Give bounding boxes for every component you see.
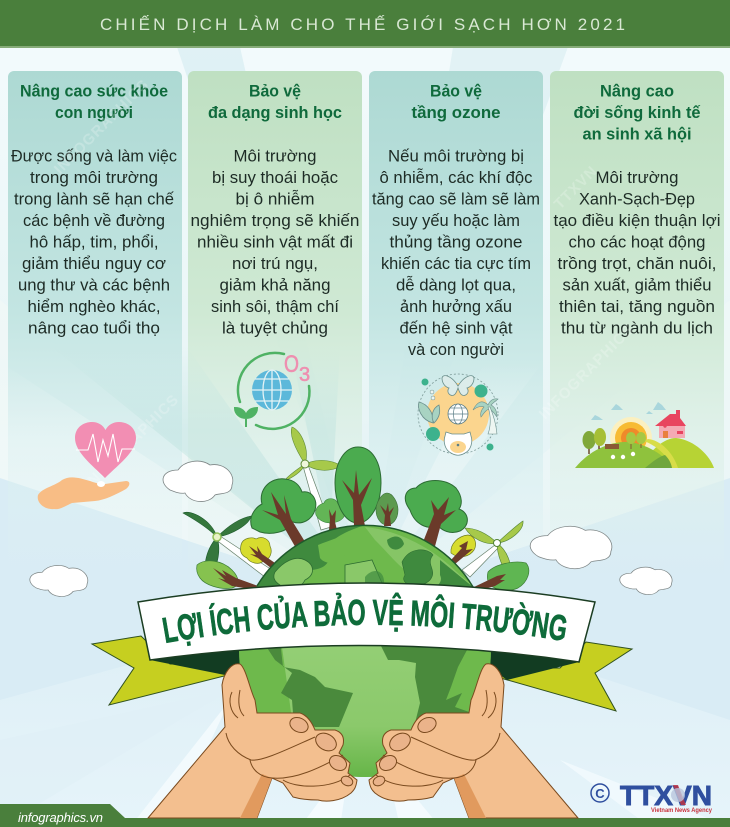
heading: ozone layer xyxy=(412,82,500,122)
text: ozone layer: đến hệ sinh vật xyxy=(400,318,513,338)
wind turbines xyxy=(183,427,523,582)
tree: large right xyxy=(405,480,467,550)
text: ozone layer: ô nhiễm, các khí độc xyxy=(380,168,533,187)
heading: biodiversity xyxy=(208,82,342,122)
watermarks: INFOGRAPHICS xyxy=(51,76,153,178)
icon: ozone globe: O xyxy=(284,351,299,378)
text: human health: các bệnh về đường xyxy=(23,211,165,230)
text: biodiversity: bị suy thoái hoặc xyxy=(212,168,338,187)
tree: small middle xyxy=(316,499,345,530)
text: ozone layer: Nếu môi trường bị xyxy=(388,146,524,166)
text: ozone layer: tăng cao sẽ làm sẽ làm xyxy=(372,190,540,208)
text: economy and welfare: thu từ ngành du lịch xyxy=(561,318,713,338)
panel: human health xyxy=(8,71,182,616)
watermarks: TTXVN xyxy=(551,163,601,213)
text: biodiversity: giảm khả năng xyxy=(220,276,330,294)
watermarks: INFOGRAPHICS xyxy=(81,391,183,493)
heading: ozone layer: tầng ozone xyxy=(412,104,500,122)
icon: biodiversity circle xyxy=(418,374,498,455)
ribbon tail left xyxy=(92,636,245,705)
text: economy and welfare: thiên tai, tăng nguồn xyxy=(559,297,715,316)
text: human health: hiểm nghèo khác, xyxy=(28,297,160,316)
text: economy and welfare: sản xuất, giảm thiểu xyxy=(562,276,712,294)
light rays over panels xyxy=(0,340,543,600)
text: biodiversity: bị ô nhiễm xyxy=(236,190,314,208)
cloud 2 xyxy=(30,565,88,597)
text: human health: Được sống và làm việc xyxy=(11,146,177,166)
heading: ozone layer: Bảo vệ xyxy=(430,82,482,100)
ribbon fold left xyxy=(150,648,245,675)
logo: TTXVN: TTXVN xyxy=(620,780,712,811)
panel: ozone layer xyxy=(369,71,543,616)
tree: yellow left xyxy=(241,538,275,568)
tree: small dark xyxy=(376,493,398,526)
text: economy and welfare: Xanh-Sạch-Đẹp xyxy=(579,190,695,208)
tree: yellow right xyxy=(451,535,476,564)
heading: biodiversity: đa dạng sinh học xyxy=(208,104,342,122)
text: human health: giảm thiểu nguy cơ xyxy=(22,254,166,273)
text: human health: ung thư và các bệnh xyxy=(18,276,170,294)
logo: TTXVN: C xyxy=(595,786,605,801)
panel: biodiversity xyxy=(188,71,362,616)
icon: ozone globe xyxy=(235,351,310,429)
hand left xyxy=(148,664,357,818)
text: economy and welfare: trồng trọt, chăn nuôi, xyxy=(558,254,716,273)
header bar xyxy=(0,0,730,48)
text: human health xyxy=(11,146,177,338)
text: human health: trong môi trường xyxy=(30,168,158,187)
text: economy and welfare: cho các hoạt động xyxy=(568,232,706,252)
ribbon fold right xyxy=(485,648,579,680)
ribbon tail right xyxy=(485,642,632,711)
text: ozone layer: dễ dàng lọt qua, xyxy=(396,276,516,294)
text: biodiversity: sinh sôi, thậm chí xyxy=(211,297,339,316)
heading: human health: Nâng cao sức khỏe xyxy=(20,82,168,100)
text: ozone layer: ảnh hưởng xấu xyxy=(400,297,512,316)
heading: biodiversity: Bảo vệ xyxy=(249,82,301,100)
heading: economy and welfare: an sinh xã hội xyxy=(582,126,692,144)
panel: economy and welfare xyxy=(550,71,724,616)
text: economy and welfare: tạo điều kiện thuận lợi xyxy=(554,211,720,230)
title: CHIẾN DỊCH LÀM CHO THẾ GIỚI SẠCH HƠN 2021 xyxy=(100,15,625,34)
text: economy and welfare: Môi trường xyxy=(596,168,678,187)
cloud 3 xyxy=(530,526,612,569)
text: human health: trong lành sẽ hạn chế xyxy=(14,190,175,208)
tree: light right low xyxy=(474,562,529,591)
watermarks xyxy=(51,76,638,493)
tree: light left low xyxy=(197,561,258,590)
text: biodiversity: Môi trường xyxy=(234,146,316,166)
cloud 1 xyxy=(163,461,233,502)
heading: human health xyxy=(20,82,168,122)
text: biodiversity: nghiêm trọng sẽ khiến xyxy=(190,211,360,230)
heading: economy and welfare: Nâng cao xyxy=(600,82,674,100)
text: human health: nâng cao tuổi thọ xyxy=(28,318,160,338)
cloud 4 xyxy=(620,567,672,595)
text: biodiversity: là tuyệt chủng xyxy=(222,318,328,338)
site name: infographics.vn xyxy=(18,810,103,825)
text: ozone layer: suy yếu hoặc làm xyxy=(392,211,520,230)
text: ozone layer: khiến các tia cực tím xyxy=(381,254,531,273)
text: biodiversity: nhiều sinh vật mất đi xyxy=(197,232,353,252)
banner xyxy=(137,582,596,663)
text: ozone layer: và con người xyxy=(408,340,504,359)
footer bar xyxy=(0,804,730,827)
hand right xyxy=(369,664,578,818)
tree: tall center xyxy=(335,447,381,526)
heading: economy and welfare: đời sống kinh tế xyxy=(574,104,701,122)
text: biodiversity xyxy=(190,146,360,338)
text: economy and welfare xyxy=(554,168,720,338)
text: ozone layer: thủng tầng ozone xyxy=(390,232,522,252)
icon: ozone globe: 3 xyxy=(299,364,310,386)
tree: large left xyxy=(251,479,316,550)
trees on globe xyxy=(197,447,529,591)
heading: economy and welfare xyxy=(574,82,701,144)
globe xyxy=(239,525,491,777)
icon: heart in hand xyxy=(38,422,136,509)
text: ozone layer xyxy=(372,146,540,359)
text: biodiversity: nơi trú ngụ, xyxy=(232,254,318,273)
watermarks: INFOGRAPHICS xyxy=(536,321,638,423)
logo: TTXVN xyxy=(591,780,712,814)
logo: TTXVN: Vietnam News Agency xyxy=(651,807,712,814)
heading: human health: con người xyxy=(55,104,133,122)
text: human health: hô hấp, tim, phổi, xyxy=(30,232,158,252)
icon: green landscape with house xyxy=(575,402,714,468)
banner title: LỢI ÍCH CỦA BẢO VỆ MÔI TRƯỜNG xyxy=(162,592,566,646)
